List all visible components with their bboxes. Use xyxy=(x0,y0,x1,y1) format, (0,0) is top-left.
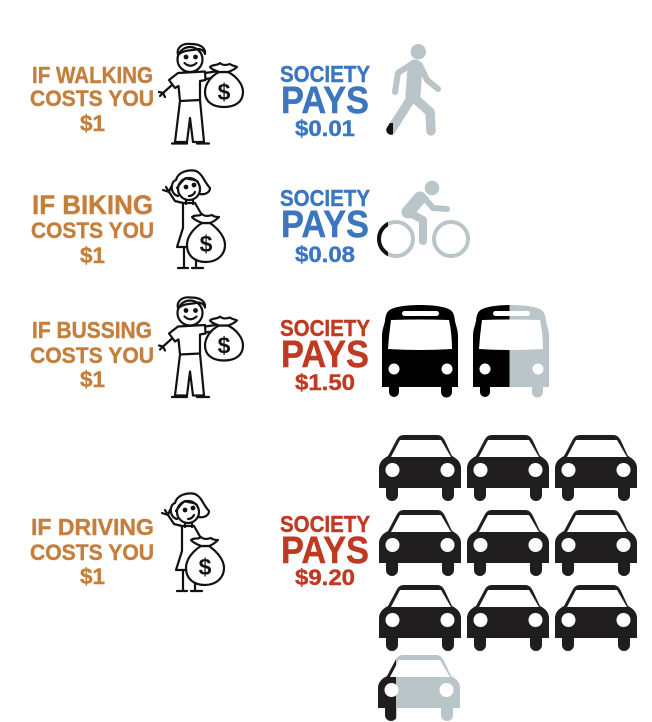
icon: woman with money bag xyxy=(163,170,225,268)
text: society pays $1.50: $1.50 xyxy=(295,370,355,395)
icon: woman with money bag: $ xyxy=(200,231,213,257)
text: society pays $1.50 xyxy=(280,315,370,395)
text: society pays $9.20: SOCIETY xyxy=(280,511,370,537)
icon: man with money bag: $ xyxy=(218,332,231,358)
text: if biking costs you $1: IF BIKING xyxy=(32,190,153,220)
icon: woman with money bag: $ xyxy=(199,554,212,580)
icon: grid of cars xyxy=(379,435,637,651)
text: society pays $0.01: SOCIETY xyxy=(280,61,370,87)
text: society pays $0.08: $0.08 xyxy=(295,242,355,267)
text: if walking costs you $1: $1 xyxy=(80,111,105,136)
text: if bussing costs you $1: COSTS YOU xyxy=(30,343,154,368)
row: biking xyxy=(31,170,468,268)
row: walking xyxy=(30,44,438,144)
text: society pays $0.08: SOCIETY xyxy=(280,185,370,211)
icon: walking person xyxy=(391,44,438,131)
text: if walking costs you $1: COSTS YOU xyxy=(30,86,154,111)
text: if biking costs you $1: $1 xyxy=(80,243,105,268)
text: society pays $9.20 xyxy=(280,511,370,590)
text: if bussing costs you $1 xyxy=(30,317,154,392)
icon: man with money bag xyxy=(159,297,243,397)
icon: full bus xyxy=(382,305,458,398)
text: if biking costs you $1: COSTS YOU xyxy=(31,218,154,243)
text: if bussing costs you $1: $1 xyxy=(80,367,105,392)
text: if walking costs you $1: IF WALKING xyxy=(32,62,153,88)
text: society pays $1.50: SOCIETY xyxy=(280,315,370,341)
icon: bicycle xyxy=(379,181,468,256)
text: society pays $9.20: PAYS xyxy=(281,530,369,572)
icon: partial car xyxy=(378,655,460,721)
text: society pays $0.01: PAYS xyxy=(281,80,369,122)
text: society pays $0.08 xyxy=(280,185,370,267)
icon: man with money bag: $ xyxy=(218,79,231,105)
row: bussing xyxy=(30,297,549,398)
text: if walking costs you $1 xyxy=(30,62,154,136)
text: if driving costs you $1: IF DRIVING xyxy=(31,514,154,540)
text: society pays $0.08: PAYS xyxy=(281,204,369,246)
text: if driving costs you $1: $1 xyxy=(80,564,105,589)
icon: woman with money bag xyxy=(162,493,224,591)
row: driving xyxy=(30,435,637,721)
text: if driving costs you $1: COSTS YOU xyxy=(30,540,154,565)
text: if bussing costs you $1: IF BUSSING xyxy=(32,317,152,343)
icon: half bus xyxy=(473,305,549,398)
text: society pays $1.50: PAYS xyxy=(281,334,369,376)
text: society pays $0.01 xyxy=(280,61,370,141)
text: society pays $0.01: $0.01 xyxy=(295,116,355,141)
text: society pays $9.20: $9.20 xyxy=(295,565,355,590)
icon: man with money bag xyxy=(159,44,243,144)
text: if biking costs you $1 xyxy=(31,190,154,268)
text: if driving costs you $1 xyxy=(30,514,154,589)
